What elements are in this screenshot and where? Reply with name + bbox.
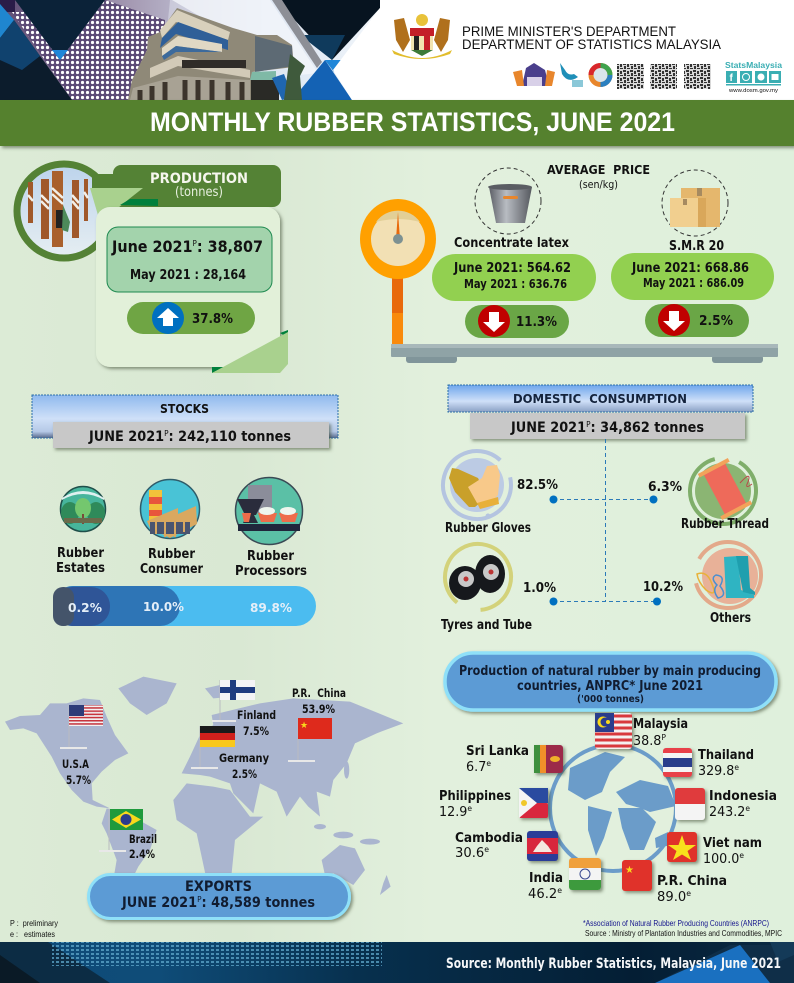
consumption: rubber gloves: Rubber Gloves: [445, 521, 531, 536]
department name: [462, 24, 721, 52]
notes: preliminary and estimates: e : estimates: [10, 929, 55, 939]
callout: production by main producing countries: countries, ANPRC* June 2021: [517, 679, 703, 694]
panel: production: : 38,807: [197, 237, 263, 256]
flag: Brazil: [99, 809, 143, 852]
SMR 20 prices: May 2021 : 686.09: [643, 276, 744, 290]
SMR 20 prices: 2.5%: [699, 314, 733, 329]
icon: rubber consumer: [140, 480, 200, 538]
icon: latex bucket: [475, 168, 541, 234]
stock labels: Estates: [56, 561, 105, 576]
flag: India: [569, 858, 601, 890]
label: Thailand: Thailand: [698, 747, 754, 763]
label: Indonesia: [709, 788, 777, 820]
consumption: others: [643, 580, 751, 626]
label: Philippines: [439, 788, 511, 820]
icon: globe: [550, 745, 676, 871]
consumption: others: 10.2%: [643, 580, 683, 595]
stock labels: Processors: [235, 564, 307, 579]
concentrate latex prices: 11.3%: [516, 315, 557, 330]
StatsMalaysia social block: StatsMalaysia: [725, 60, 782, 70]
flag: Sri Lanka: [534, 745, 563, 773]
icon: boxes: [662, 170, 728, 236]
label: Viet Nam: 100.0: [703, 851, 742, 867]
label: Philippines: e: [467, 804, 472, 813]
panel: stocks: [32, 395, 338, 626]
flag: Finland: [212, 680, 255, 722]
panel: domestic consumption: JUNE 2021: [511, 420, 593, 436]
label: Indonesia: 243.2: [709, 804, 748, 820]
label: Sri Lanka: e: [486, 759, 491, 768]
panel: production: [17, 164, 288, 373]
icon: rubber thread: [677, 445, 769, 537]
panel: average price: AVERAGE PRICE: [547, 163, 650, 177]
footer band: [0, 942, 794, 983]
panel: stocks: JUNE 2021: [89, 429, 171, 445]
connector dots: [550, 496, 661, 606]
label: Cambodia: e: [484, 845, 489, 854]
consumption: tyres and tube: [441, 581, 556, 633]
stock share bar: 10.0%: [143, 599, 184, 614]
label: Malaysia: Malaysia: [633, 716, 688, 732]
stock labels: [56, 546, 307, 579]
label: Indonesia: e: [745, 804, 750, 813]
department name: PRIME MINISTER'S DEPARTMENT: [462, 24, 676, 39]
stock labels: Rubber: [57, 546, 105, 561]
panel: production: P: [192, 239, 197, 248]
label: PR China: P.R. China: [657, 873, 727, 889]
panel: domestic consumption: P: [586, 420, 591, 429]
label: Thailand: 329.8: [698, 763, 737, 779]
panel: production: June 2021: [112, 237, 202, 256]
icon: tyres and tube: [433, 532, 523, 622]
icon: weighing scale: [360, 199, 778, 363]
label: China: P.R. China: [292, 686, 346, 700]
consumption: tyres and tube: Tyres and Tube: [441, 618, 532, 633]
label: Brazil: Brazil: [129, 832, 157, 846]
label: Finland: 7.5%: [243, 724, 269, 738]
concentrate latex prices: May 2021 : 636.76: [464, 277, 567, 291]
label: Viet Nam: Viet nam: [703, 835, 762, 851]
notes: preliminary and estimates: P : preliminary: [10, 918, 59, 928]
connector tab: [92, 174, 120, 188]
icon: rubber trees: [17, 164, 111, 258]
callout: production by main producing countries: ('000 tonnes): [577, 694, 644, 705]
department name: DEPARTMENT OF STATISTICS MALAYSIA: [462, 37, 721, 52]
consumption: rubber gloves: [445, 478, 558, 536]
label: Brazil: [129, 832, 157, 861]
label: Philippines: 12.9: [439, 804, 469, 820]
consumption: others: Others: [710, 611, 751, 626]
label: Germany: Germany: [219, 751, 269, 765]
stock share bar: 0.2%: [68, 600, 102, 615]
label: Finland: Finland: [237, 708, 276, 722]
partner logos and QR codes: [513, 63, 711, 89]
stock labels: Consumer: [140, 562, 203, 577]
label: Brazil: 2.4%: [129, 847, 155, 861]
flag: Philippines: [519, 788, 548, 818]
label: India: India: [529, 870, 563, 886]
consumption: rubber thread: [648, 480, 769, 532]
label: Germany: 2.5%: [232, 767, 257, 781]
SMR 20 prices: S.M.R 20: [669, 239, 724, 254]
panel: domestic consumption: : 34,862 tonnes: [591, 420, 704, 436]
label: Thailand: e: [734, 763, 739, 772]
flag: Germany: [191, 726, 235, 769]
consumption: rubber thread: Rubber Thread: [681, 517, 769, 532]
SMR 20 prices: [611, 239, 774, 337]
footnotes: [583, 918, 782, 938]
icon: rubber processors: [236, 478, 302, 544]
label: Thailand: [698, 747, 754, 779]
panel: average price: [360, 163, 778, 363]
concentrate latex prices: June 2021: 564.62: [453, 260, 571, 276]
panel: stocks: : 242,110 tonnes: [169, 429, 291, 445]
label: Malaysia: [633, 716, 688, 749]
label: India: e: [557, 886, 562, 895]
label: PR China: [657, 873, 727, 905]
consumption: tyres and tube: 1.0%: [523, 581, 556, 596]
world map: [5, 677, 403, 895]
label: India: [528, 870, 563, 902]
panel: domestic consumption: [431, 385, 774, 633]
label: Philippines: Philippines: [439, 788, 511, 804]
label: USA: U.S.A: [62, 757, 89, 771]
panel: production: (tonnes): [175, 185, 223, 200]
concentrate latex prices: Concentrate latex: [454, 236, 570, 251]
callout: exports: EXPORTS: [185, 879, 252, 895]
label: Sri Lanka: 6.7: [466, 759, 487, 775]
stock share bar: [53, 586, 316, 626]
label: Germany: [219, 751, 269, 781]
label: Sri Lanka: Sri Lanka: [466, 743, 529, 759]
stock labels: Rubber: [247, 549, 295, 564]
panel: production: 37.8%: [192, 312, 233, 327]
flag: PR China: [622, 860, 652, 891]
consumption: rubber thread: 6.3%: [648, 480, 682, 495]
label: China: 53.9%: [302, 702, 335, 716]
concentrate latex prices: [432, 236, 596, 338]
label: Viet Nam: e: [739, 851, 744, 860]
label: Viet Nam: [703, 835, 762, 867]
StatsMalaysia social block: f: [730, 73, 734, 84]
label: Sri Lanka: [466, 743, 529, 775]
callout: production by main producing countries: [445, 653, 776, 710]
flag: Thailand: [663, 748, 692, 777]
stock labels: Rubber: [148, 547, 196, 562]
flag: Cambodia: [527, 831, 558, 861]
panel: stocks: STOCKS: [160, 402, 209, 416]
coat of arms: [392, 14, 452, 59]
callout: exports: JUNE 2021: [122, 895, 204, 911]
panel: domestic consumption: DOMESTIC CONSUMPTION: [513, 392, 687, 406]
label: Indonesia: Indonesia: [709, 788, 777, 804]
consumption: rubber gloves: 82.5%: [517, 478, 558, 493]
label: USA: 5.7%: [66, 773, 91, 787]
SMR 20 prices: June 2021: 668.86: [631, 260, 749, 276]
label: USA: [62, 757, 91, 787]
panel: production: May 2021 : 28,164: [130, 268, 246, 283]
StatsMalaysia social block: www.dosm.gov.my: [728, 88, 778, 94]
label: Malaysia: P: [661, 733, 666, 742]
flag: Malaysia: [595, 713, 632, 749]
panel: production: PRODUCTION: [150, 171, 248, 187]
title band: [0, 100, 794, 146]
callout: exports: : 48,589 tonnes: [202, 895, 315, 911]
notes: preliminary and estimates: [10, 918, 59, 939]
icon: other products: [682, 529, 774, 621]
flag: China: ★: [300, 721, 308, 731]
flag: Indonesia: [675, 788, 705, 820]
flag: China: [288, 718, 332, 762]
label: Cambodia: 30.6: [455, 845, 485, 861]
icon: rubber estates: [60, 486, 106, 532]
StatsMalaysia social block: [725, 60, 782, 94]
stock share bar: 89.8%: [250, 600, 292, 615]
label: China: [292, 686, 346, 716]
panel: stocks: P: [164, 429, 169, 438]
header white panel: [333, 0, 794, 100]
building photo: [128, 8, 305, 100]
connector lines: [553, 439, 657, 602]
title band: MONTHLY RUBBER STATISTICS, JUNE 2021: [150, 107, 675, 137]
label: Malaysia: 38.8: [633, 733, 663, 749]
flag: PR China: ★: [625, 865, 634, 876]
callout: exports: [88, 874, 350, 918]
panel: average price: (sen/kg): [579, 178, 618, 191]
label: PR China: e: [686, 889, 691, 898]
label: PR China: 89.0: [657, 889, 687, 905]
label: Finland: [237, 708, 276, 738]
flag: USA: [60, 705, 103, 749]
label: Cambodia: [455, 830, 523, 861]
callout: exports: P: [197, 895, 202, 904]
header banner photo panel: [0, 0, 380, 100]
label: Cambodia: Cambodia: [455, 830, 523, 846]
flag: Viet Nam: [667, 832, 697, 862]
label: India: 46.2: [528, 886, 558, 902]
icon: rubber gloves: [431, 439, 523, 531]
